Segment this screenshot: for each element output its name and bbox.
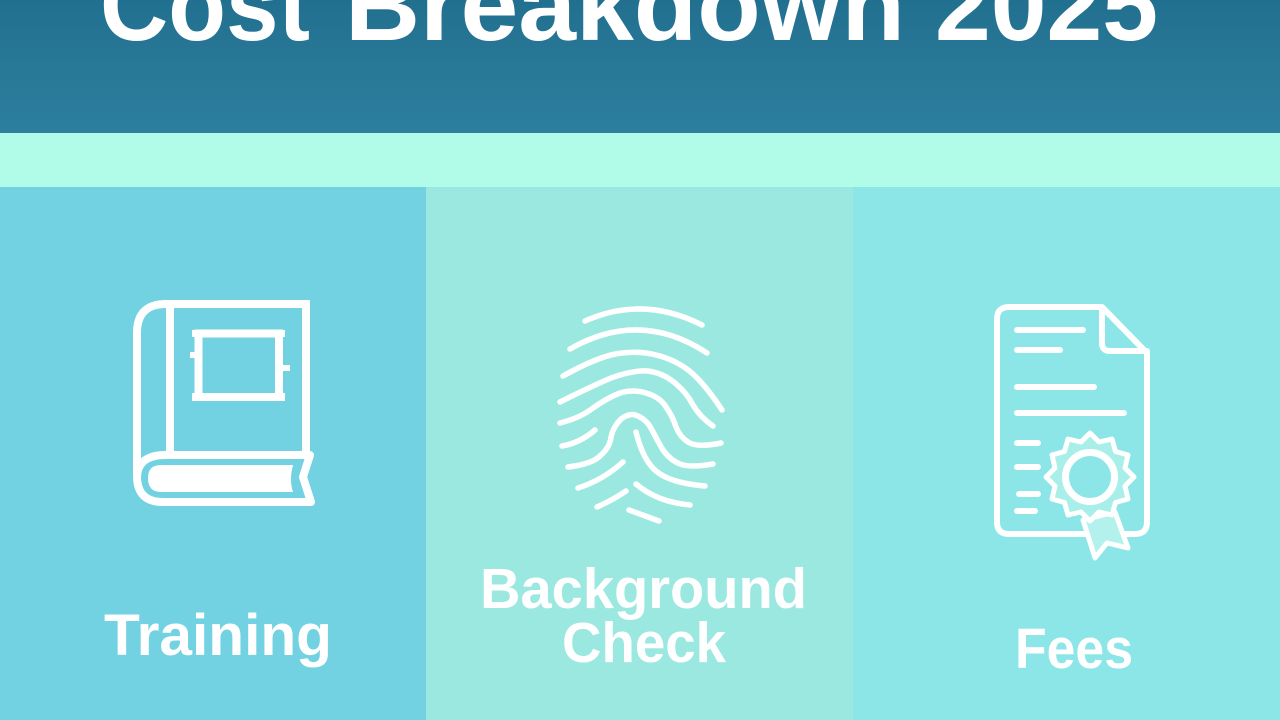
panel: background check (426, 187, 853, 720)
accent strip (0, 133, 1280, 187)
label: background check (480, 557, 807, 675)
label: fees: Fees (1015, 617, 1133, 681)
icon: certificate document (997, 307, 1147, 558)
icon: book (137, 304, 311, 502)
panel: fees (853, 187, 1280, 720)
label: training: Training (104, 603, 332, 668)
label: background check: Check (562, 611, 726, 675)
panel: training (0, 187, 426, 720)
icon: fingerprint (560, 309, 722, 521)
label: background check: Background (480, 557, 807, 621)
header band (0, 0, 1280, 133)
title (100, 0, 1158, 62)
